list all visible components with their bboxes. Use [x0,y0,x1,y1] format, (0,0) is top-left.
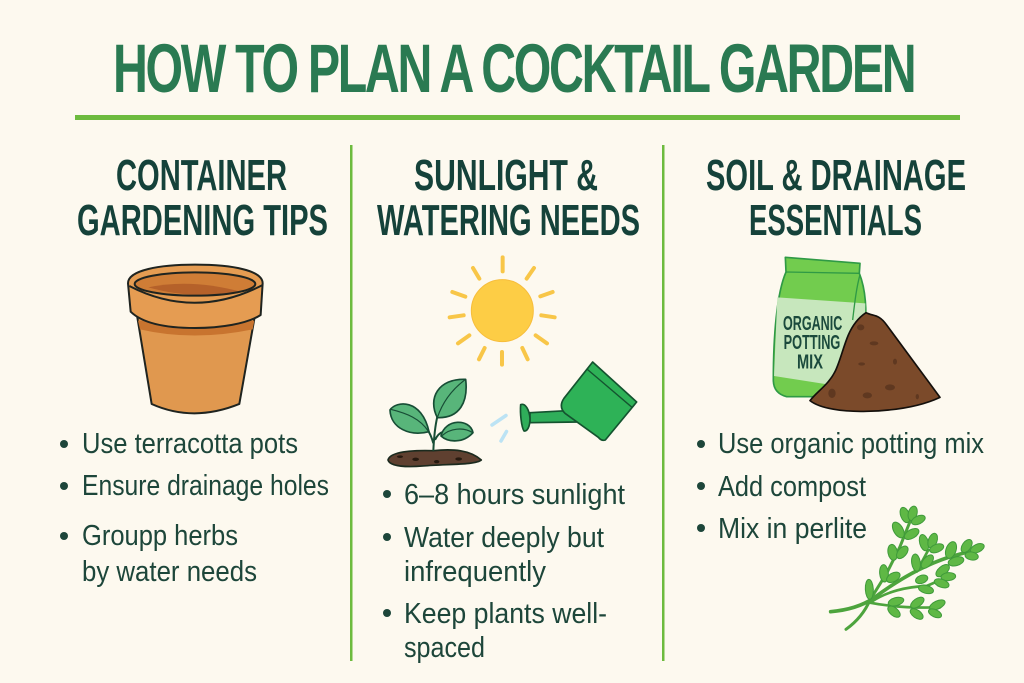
list: sunlight tips: spaced [404,632,485,664]
icon: terracotta pot [128,265,263,413]
heading: container gardening tips: CONTAINER [116,152,287,200]
heading: soil and drainage essentials [706,152,966,245]
heading: sunlight and watering needs: SUNLIGHT & [414,152,598,200]
list: container tips [60,428,329,588]
list: soil tips: Use organic potting mix [718,428,984,460]
label: organic potting mix: ORGANIC [783,312,842,335]
panel: sunlight and watering needs [377,152,640,664]
heading: soil and drainage essentials: ESSENTIALS [749,197,922,245]
icon: watering can [520,362,637,440]
list: sunlight tips: Keep plants well- [404,598,607,630]
label: organic potting mix: POTTING [784,331,840,354]
panel: container gardening tips [60,152,329,588]
list: soil tips: Add compost [718,471,866,503]
list: sunlight tips [383,479,625,664]
list: soil tips: Mix in perlite [718,513,867,545]
list: sunlight tips: 6–8 hours sunlight [404,479,625,511]
heading: sunlight and watering needs [377,152,640,245]
list: container tips: Groupp herbs [82,520,238,552]
icon: potting mix bag [773,257,866,397]
icon: sun [450,257,555,365]
title: HOW TO PLAN A COCKTAIL GARDEN [113,29,917,107]
panel: soil and drainage essentials [697,152,986,629]
list: sunlight tips: Water deeply but [404,522,604,554]
label: organic potting mix [783,312,842,373]
icon: soil pile [810,313,940,411]
icon: seedling [388,379,481,467]
icon: thyme sprig [831,505,986,629]
heading: sunlight and watering needs: WATERING NEEDS [377,197,640,245]
list: container tips: by water needs [82,556,257,588]
list: soil tips [697,428,984,545]
list: container tips: Ensure drainage holes [82,470,329,502]
heading: container gardening tips [77,152,328,245]
icon: water drops [492,416,506,441]
list: sunlight tips: infrequently [404,556,546,588]
label: organic potting mix: MIX [797,350,823,373]
list: container tips: Use terracotta pots [82,428,298,460]
heading: container gardening tips: GARDENING TIPS [77,197,328,245]
